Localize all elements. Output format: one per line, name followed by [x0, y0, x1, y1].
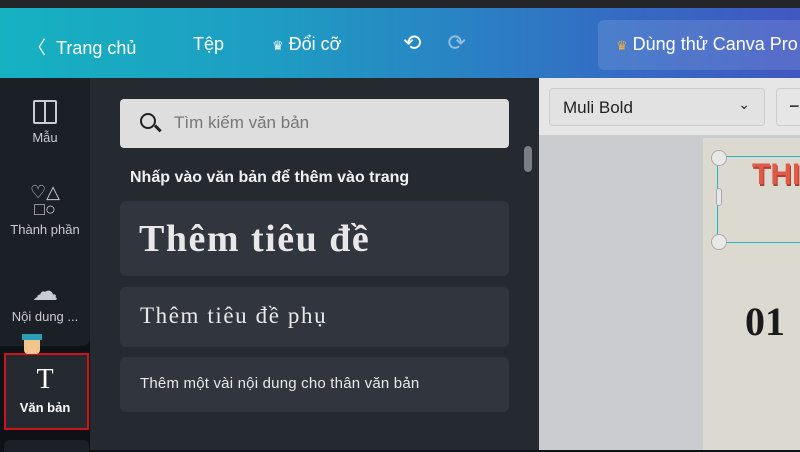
font toolbar	[539, 78, 800, 136]
text panel	[90, 78, 539, 450]
sidebar item: Nội dung: Nội dung ...	[12, 309, 78, 324]
panel instruction: Nhấp vào văn bản để thêm vào trang	[130, 169, 409, 186]
search box: Tìm kiếm văn bản	[174, 113, 309, 132]
resize menu: ♛ Đổi cỡ	[272, 34, 341, 54]
number 01: 01	[745, 299, 785, 344]
card: body text	[120, 357, 509, 412]
top dark strip	[0, 0, 800, 8]
sidebar item: Nội dung	[12, 276, 78, 324]
scrollbar	[524, 146, 532, 172]
card: heading: Thêm tiêu đề	[139, 218, 370, 260]
font selector: ⌄	[738, 96, 750, 112]
font selector: Muli Bold	[563, 98, 633, 117]
canvas page	[703, 138, 800, 450]
sidebar item: Thành phần: ♡△	[30, 182, 60, 202]
sidebar item: Nội dung: ☁	[32, 276, 58, 306]
search box	[120, 99, 509, 148]
canvas page: THI	[752, 158, 800, 191]
collapse tab: ‹	[539, 344, 543, 359]
card: body text: Thêm một vài nội dung cho thân văn bản	[140, 375, 419, 392]
collapse tab	[530, 300, 552, 402]
sidebar item: Thành phần	[10, 182, 80, 237]
selected title text	[717, 156, 800, 243]
card: subheading: Thêm tiêu đề phụ	[140, 303, 327, 328]
try canva pro button: ♛ Dùng thử Canva Pro	[616, 34, 798, 54]
left sidebar: Văn bản	[20, 400, 70, 415]
card: subheading	[120, 287, 509, 347]
undo redo icons: ⟲ ⟳	[403, 30, 466, 55]
selected item: Văn bản	[4, 353, 89, 430]
editor area	[539, 78, 800, 450]
back to home: 〈 Trang chủ	[28, 38, 136, 58]
icon: pointing hand	[22, 334, 42, 340]
left sidebar	[0, 78, 90, 450]
sidebar item: Mẫu: Mẫu	[32, 130, 58, 145]
file menu: Tệp	[193, 34, 224, 54]
top toolbar	[0, 8, 800, 78]
sidebar item: Thành phần: Thành phần	[10, 222, 80, 237]
font selector	[549, 88, 765, 126]
editor area: −	[789, 96, 800, 116]
try canva pro button	[598, 20, 800, 70]
sidebar item: Thành phần: □○	[34, 199, 56, 219]
left sidebar: T	[36, 364, 54, 395]
card: heading	[120, 201, 509, 276]
